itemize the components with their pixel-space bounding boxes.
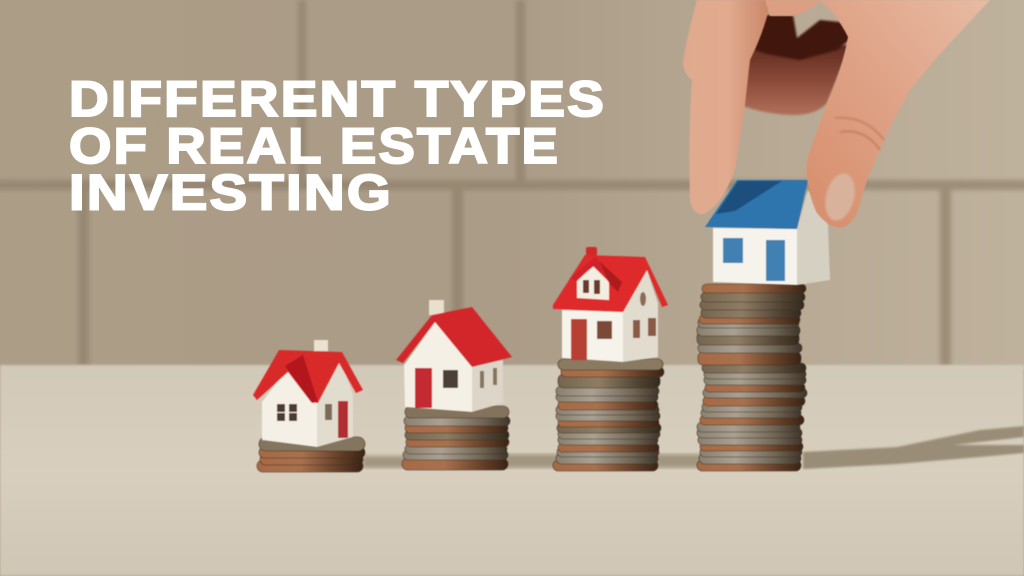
house 4 xyxy=(705,180,830,285)
index finger xyxy=(683,0,771,214)
coin stack 2 xyxy=(402,406,510,470)
table surface xyxy=(0,365,1024,576)
title: INVESTING xyxy=(69,164,393,220)
knuckle top xyxy=(765,0,820,16)
house 2 xyxy=(396,300,512,412)
title: OF REAL ESTATE xyxy=(69,118,560,174)
title: DIFFERENT TYPES xyxy=(69,71,606,127)
title xyxy=(69,71,606,220)
coin stack 1 xyxy=(257,437,365,472)
wall background xyxy=(0,0,1024,370)
house 1 xyxy=(253,340,363,447)
thumb xyxy=(806,0,990,228)
house 3 xyxy=(553,247,668,362)
shadowed curled fingers xyxy=(755,15,852,60)
hand pinching the blue house xyxy=(683,0,990,228)
middle finger xyxy=(740,45,850,115)
coin stack 4 xyxy=(697,284,807,471)
coin stack 3 xyxy=(553,359,664,471)
